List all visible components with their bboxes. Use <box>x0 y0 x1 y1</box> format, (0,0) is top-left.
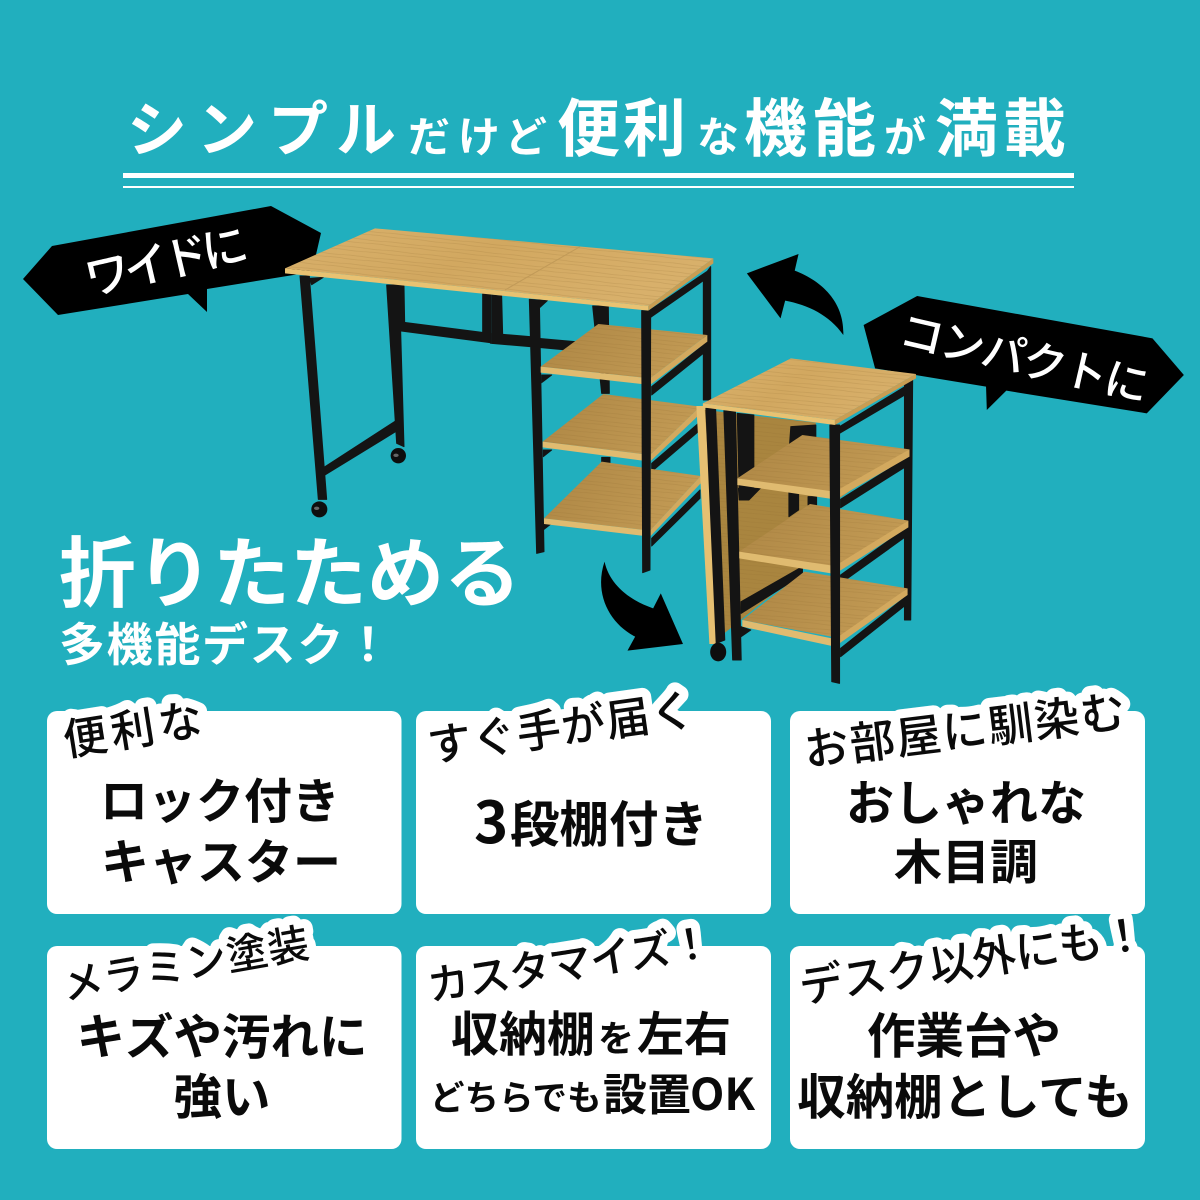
panel: 作業台や収納棚としても: 作業台や <box>867 997 1061 1067</box>
title <box>127 79 1066 170</box>
panel: おしゃれな木目調: 木目調 <box>894 823 1038 893</box>
title: 機能 <box>744 79 876 170</box>
panel: 収納棚を左右どちらでも設置OK: 収納棚 <box>451 995 595 1065</box>
panel: 収納棚を左右どちらでも設置OK <box>416 909 771 1149</box>
wide desk illustration <box>285 228 713 573</box>
panel: 3段棚付き: 段棚付き <box>510 786 708 857</box>
title underline rules <box>123 173 1074 188</box>
panel: おしゃれな木目調: おしゃれな <box>846 764 1086 834</box>
folded compact desk illustration <box>696 358 916 683</box>
panel: キズや汚れに強い: キズや汚れに <box>76 998 368 1068</box>
title: シンプル <box>127 82 396 169</box>
panel: 収納棚を左右どちらでも設置OK: 左右 <box>637 996 731 1065</box>
panel: キズや汚れに強い: メラミン塗装 <box>57 909 313 1012</box>
callout: ワイドに: ワイドに <box>77 208 254 310</box>
panel: 収納棚を左右どちらでも設置OK: どちらでも <box>430 1070 601 1120</box>
arrow: curved up-left <box>747 254 843 335</box>
callout: コンパクトに <box>864 296 1184 413</box>
panel: 収納棚を左右どちらでも設置OK: を <box>598 1010 634 1062</box>
panel: ロック付きキャスター: ロック付き <box>100 762 340 832</box>
title: だけど <box>408 104 547 165</box>
panel: おしゃれな木目調 <box>790 675 1145 914</box>
callout: ワイドに <box>23 206 321 315</box>
panel: 作業台や収納棚としても: デスク以外にも！ <box>794 898 1149 1016</box>
main headline <box>59 513 521 675</box>
panel: ロック付きキャスター: 便利な <box>58 683 210 769</box>
callout label: コンパクトに: コンパクトに <box>894 295 1156 415</box>
main headline: 多機能デスク！ <box>59 609 391 675</box>
panel: ロック付きキャスター <box>47 683 402 914</box>
panel: 作業台や収納棚としても <box>790 898 1149 1149</box>
title: 満載 <box>935 79 1066 170</box>
panel: 収納棚を左右どちらでも設置OK: OK <box>690 1059 756 1123</box>
panel: 収納棚を左右どちらでも設置OK: 設置 <box>603 1059 691 1123</box>
title: な <box>697 104 739 165</box>
panel: 3段棚付き: すぐ手が届く <box>423 674 699 775</box>
panel: 3段棚付き: 3 <box>474 776 508 860</box>
panel: おしゃれな木目調: お部屋に馴染む <box>800 675 1130 779</box>
panel: キズや汚れに強い <box>47 909 402 1149</box>
panel: 3段棚付き <box>416 674 771 914</box>
panel: 収納棚を左右どちらでも設置OK: カスタマイズ！ <box>422 909 715 1014</box>
main headline: 折りたためる <box>59 513 521 624</box>
panel: 作業台や収納棚としても: 収納棚としても <box>797 1058 1133 1128</box>
panel: キズや汚れに強い: 強い <box>173 1058 271 1128</box>
arrow: curved down-right <box>601 562 683 651</box>
panel: ロック付きキャスター: キャスター <box>101 823 341 893</box>
title: 便利 <box>557 79 686 170</box>
title: が <box>884 104 926 165</box>
